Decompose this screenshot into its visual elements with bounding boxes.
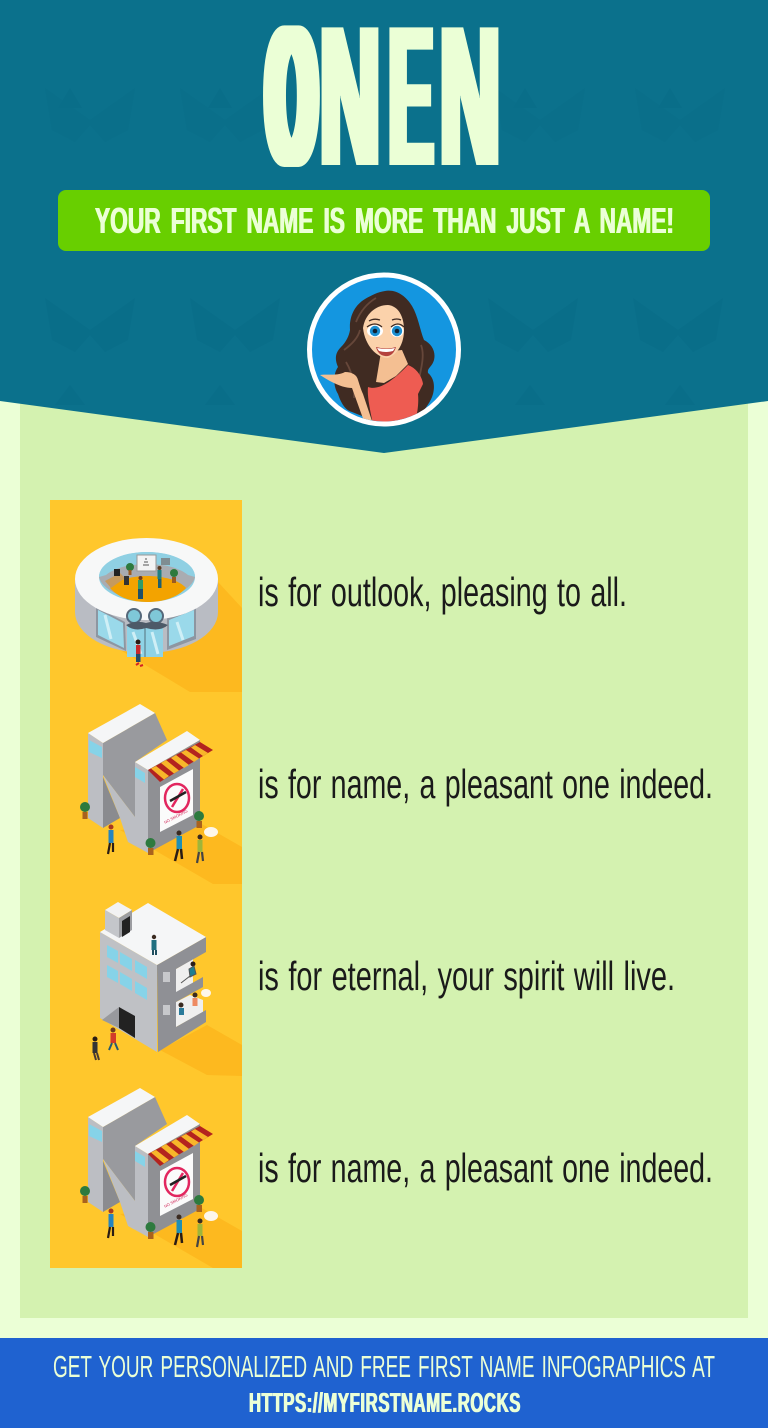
windows (107, 945, 147, 1000)
no smoking sign: NO SMOKING (163, 1192, 188, 1209)
avatar: cartoon woman in circle (310, 275, 458, 424)
face (363, 305, 404, 358)
no smoking sign (160, 769, 193, 832)
balcony details (163, 962, 211, 1015)
plants (80, 1186, 204, 1239)
illustration: letter E office building (92, 902, 242, 1076)
neck and chest (376, 350, 408, 383)
shirt (368, 365, 423, 424)
footer url: HTTPS://MYFIRSTNAME.ROCKS (249, 1387, 521, 1418)
content panel (20, 380, 748, 1318)
eyes (367, 319, 404, 337)
glasses and moustache sign (126, 609, 168, 629)
interior wall base (99, 564, 195, 594)
hair (334, 291, 435, 420)
people (92, 935, 156, 1060)
awning (148, 742, 213, 782)
windows (96, 607, 196, 657)
hair highlights (344, 298, 423, 398)
windows (89, 740, 145, 783)
shadow (120, 1207, 242, 1268)
yellow image column (50, 500, 242, 1268)
people (108, 824, 218, 863)
shadow (160, 1025, 242, 1076)
people (108, 1208, 218, 1247)
shadow (122, 582, 242, 692)
no smoking sign: NO SMOKING (163, 808, 188, 825)
illustration: letter N building, repeat (80, 1088, 242, 1268)
windows (89, 1124, 145, 1167)
interior floor (110, 576, 186, 602)
footer band (0, 1338, 768, 1428)
arm and hand (320, 372, 373, 424)
awning (148, 1126, 213, 1166)
subtitle banner (58, 190, 710, 251)
ring roof (75, 538, 218, 620)
title (268, 0, 500, 208)
interior details (105, 555, 178, 599)
shadow (120, 823, 242, 884)
ring wall (75, 579, 218, 653)
smile (376, 347, 396, 356)
woman walking (136, 640, 143, 666)
illustration: round optician building O (75, 538, 242, 692)
balconies (176, 959, 203, 1027)
no smoking sign (160, 1153, 193, 1216)
entrance (102, 1007, 135, 1038)
illustration: letter N building (80, 704, 242, 884)
plants (80, 802, 204, 855)
rooftop box (105, 902, 132, 938)
header band with chevron (0, 0, 768, 453)
interior back wall (99, 552, 195, 602)
